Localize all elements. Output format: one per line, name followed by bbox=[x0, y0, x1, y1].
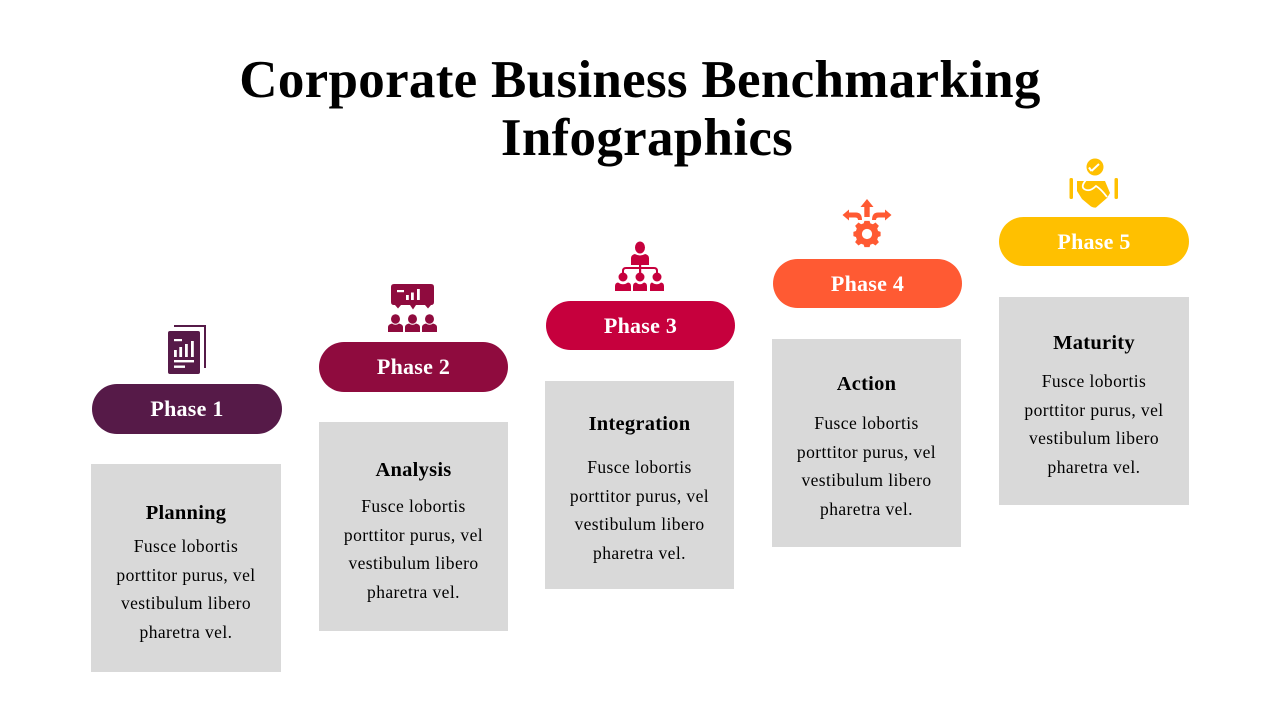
panel: analysis bbox=[319, 422, 508, 631]
panel: planning bbox=[91, 464, 281, 672]
analysis text: pharetra vel. bbox=[367, 582, 460, 602]
phase 1 pill bbox=[92, 384, 282, 434]
phase 3 pill: Phase 3 bbox=[604, 313, 677, 338]
icon: org chart bbox=[615, 242, 664, 291]
analysis text: vestibulum libero bbox=[348, 553, 479, 573]
analysis heading: Analysis bbox=[375, 459, 452, 481]
title bbox=[239, 51, 1041, 167]
planning heading: Planning bbox=[146, 502, 226, 524]
action text: porttitor purus, vel bbox=[797, 442, 936, 462]
maturity heading: Maturity bbox=[1053, 332, 1135, 354]
phase 5 pill: Phase 5 bbox=[1057, 229, 1131, 254]
integration text: pharetra vel. bbox=[593, 543, 686, 563]
panel: maturity bbox=[999, 297, 1189, 505]
integration text: vestibulum libero bbox=[574, 514, 705, 534]
phase 1 pill: Phase 1 bbox=[150, 396, 224, 421]
analysis text bbox=[344, 496, 483, 602]
phase 5 pill bbox=[999, 217, 1189, 266]
icon: gear with arrows bbox=[842, 199, 892, 248]
title: Infographics bbox=[501, 109, 793, 167]
planning text: Fusce lobortis bbox=[134, 536, 238, 556]
title: Corporate Business Benchmarking bbox=[239, 51, 1041, 109]
planning text: pharetra vel. bbox=[140, 622, 232, 642]
action text: Fusce lobortis bbox=[814, 413, 919, 433]
maturity text: Fusce lobortis bbox=[1042, 371, 1146, 391]
action text bbox=[797, 413, 936, 519]
maturity text: vestibulum libero bbox=[1029, 428, 1159, 448]
action text: vestibulum libero bbox=[801, 470, 932, 490]
planning text bbox=[116, 536, 256, 642]
action text: pharetra vel. bbox=[820, 499, 913, 519]
integration heading: Integration bbox=[589, 413, 690, 435]
phase 2 pill bbox=[319, 342, 508, 392]
icon: handshake with check bbox=[1070, 158, 1118, 208]
icon: audience with chart bubble bbox=[388, 284, 437, 332]
action heading: Action bbox=[837, 373, 896, 395]
phase 2 pill: Phase 2 bbox=[377, 354, 450, 379]
maturity text: pharetra vel. bbox=[1048, 457, 1140, 477]
planning text: vestibulum libero bbox=[121, 593, 251, 613]
panel: action bbox=[772, 339, 961, 547]
icon: report pages bbox=[168, 325, 206, 374]
maturity text: porttitor purus, vel bbox=[1024, 400, 1164, 420]
analysis text: porttitor purus, vel bbox=[344, 525, 483, 545]
phase 4 pill: Phase 4 bbox=[831, 271, 904, 296]
integration text bbox=[570, 457, 709, 563]
integration text: porttitor purus, vel bbox=[570, 486, 709, 506]
analysis text: Fusce lobortis bbox=[361, 496, 466, 516]
phase 4 pill bbox=[773, 259, 962, 308]
phase 3 pill bbox=[546, 301, 735, 350]
maturity text bbox=[1024, 371, 1164, 477]
panel: integration bbox=[545, 381, 734, 589]
planning text: porttitor purus, vel bbox=[116, 565, 256, 585]
integration text: Fusce lobortis bbox=[587, 457, 692, 477]
